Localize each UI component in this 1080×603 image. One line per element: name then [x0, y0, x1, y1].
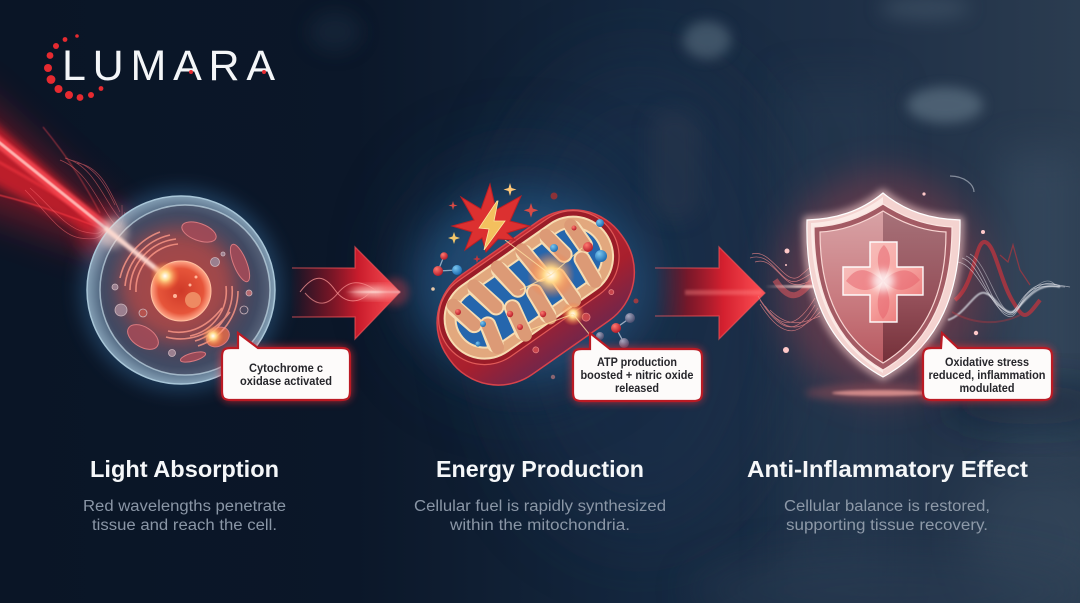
shield inner	[814, 204, 952, 370]
logo	[44, 34, 275, 101]
beam entry into cell	[105, 228, 165, 276]
callout: ATP: boosted + nitric oxide	[580, 370, 694, 382]
waves left	[750, 253, 820, 331]
floor glow	[832, 390, 928, 396]
organelles: mitochondria	[123, 218, 254, 364]
medical cross	[843, 242, 923, 322]
matrix particles	[455, 219, 607, 347]
icon: molecule left	[431, 252, 462, 291]
bubbles on body	[530, 289, 619, 357]
icon: molecule right	[550, 192, 638, 379]
organelles: endoplasmic reticulum	[120, 232, 238, 346]
text block: light absorption: Red wavelengths penetrate	[83, 498, 286, 515]
text block: light absorption	[83, 456, 286, 534]
waves right	[948, 242, 1070, 322]
callout: oxidative stress	[921, 333, 1054, 402]
text block: energy production: Energy Production	[436, 456, 644, 482]
icon: laser beam	[0, 80, 175, 276]
icon: sparkles	[448, 183, 538, 263]
callout: ATP: ATP production	[597, 357, 677, 369]
energy sparks	[505, 240, 590, 335]
text block: energy production: Cellular fuel is rapidly synthesized	[414, 498, 666, 515]
callout: oxidative stress: reduced, inflammation	[928, 370, 1046, 382]
callout: cytochrome: Cytochrome c	[249, 363, 324, 375]
logo wordmark: LUMARA	[62, 42, 275, 90]
nucleus	[151, 261, 211, 321]
text block: energy production	[414, 456, 666, 534]
callout: oxidative stress: Oxidative stress	[945, 357, 1029, 369]
logo dots	[44, 34, 103, 101]
text block: anti-inflammatory effect: supporting tissue recovery.	[786, 517, 988, 534]
icon: burst with lightning bolt	[452, 184, 530, 252]
icon: mitochondrion	[412, 183, 658, 408]
arrow: energy production to anti-inflammatory effect	[645, 247, 765, 339]
icon: cell	[79, 188, 283, 392]
callout: oxidative stress: modulated	[960, 383, 1014, 395]
cell membrane	[87, 196, 275, 384]
text block: energy production: within the mitochondria.	[449, 517, 630, 534]
icon: shield with waves	[750, 173, 1070, 402]
text block: anti-inflammatory effect: Anti-Inflammatory Effect	[747, 456, 1028, 482]
cristae folds	[452, 222, 605, 356]
text block: light absorption: Light Absorption	[90, 456, 279, 482]
callout: cytochrome: oxidase activated	[240, 376, 332, 388]
organelles: vesicles	[112, 252, 252, 356]
text block: light absorption: tissue and reach the cell.	[92, 517, 277, 534]
glow particles	[783, 192, 985, 353]
mitochondrion body	[414, 187, 658, 408]
arrow: light absorption to energy production	[280, 247, 410, 339]
callout: ATP	[571, 333, 704, 403]
shield outer frame	[807, 193, 960, 377]
callout: cytochrome	[220, 333, 352, 402]
callout: ATP: released	[615, 383, 659, 395]
text block: anti-inflammatory effect: Cellular balance is restored,	[784, 498, 990, 515]
text block: anti-inflammatory effect	[747, 456, 1028, 534]
